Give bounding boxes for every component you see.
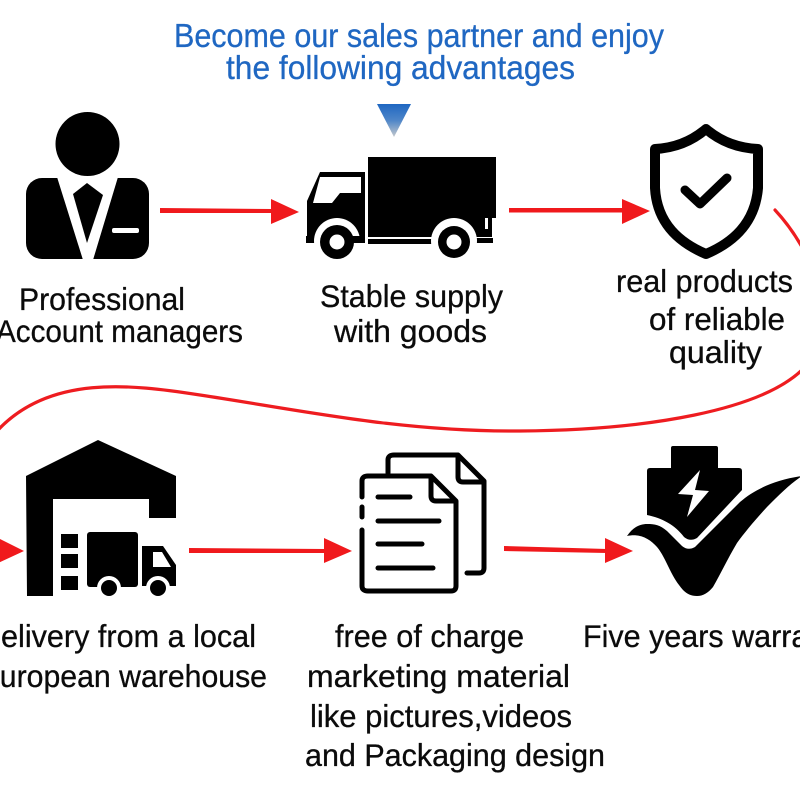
text: professional account managers: Account managers [0, 313, 243, 349]
text: real products: real products [616, 263, 793, 299]
icon: account manager [26, 112, 149, 260]
icon: warehouse with truck [26, 440, 176, 600]
text: professional account managers [0, 281, 243, 349]
text: stable supply: Stable supply [320, 278, 503, 314]
arrow: into warehouse [0, 538, 24, 563]
icon: documents [362, 455, 484, 591]
text: real products: quality [669, 334, 762, 370]
arrow: curved connector between rows [0, 210, 800, 431]
text: professional account managers: Professional [19, 281, 185, 317]
text: marketing material: and Packaging design [305, 737, 605, 773]
icon: shield with check [655, 129, 758, 254]
text: real products [616, 263, 793, 370]
arrow: supply to quality [509, 199, 650, 224]
arrow: documents to warranty [504, 538, 633, 563]
arrow: warehouse to documents [189, 538, 352, 563]
title: the following advantages [226, 49, 575, 86]
text: marketing material: like pictures,videos [310, 698, 572, 734]
text: real products: of reliable [649, 301, 785, 337]
text: stable supply [320, 278, 503, 349]
icon: battery warranty check [627, 446, 800, 596]
text: marketing material: marketing material [307, 658, 570, 694]
title: Become our sales partner and enjoy [174, 17, 664, 54]
title [174, 17, 664, 86]
text: marketing material: free of charge [335, 618, 524, 654]
text: stable supply: with goods [333, 313, 487, 349]
arrow: managers to supply [160, 199, 299, 224]
text: delivery from warehouse [0, 618, 267, 694]
text: marketing material [305, 618, 605, 773]
icon: gradient pointer triangle [377, 104, 411, 137]
icon: delivery truck [306, 157, 496, 264]
